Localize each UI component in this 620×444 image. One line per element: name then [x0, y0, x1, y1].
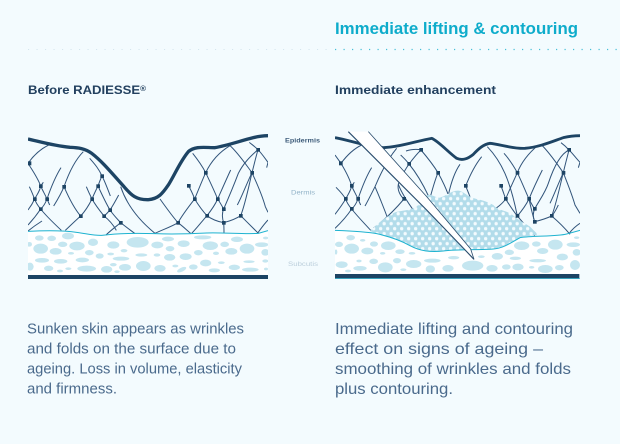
- filler deposit: [370, 191, 538, 251]
- text block: before description: ageing. Loss in volume, elasticity: [27, 362, 243, 378]
- fat cells: [335, 235, 581, 273]
- text block: before description: and folds on the surface due to: [27, 342, 236, 358]
- fibre nodes: [28, 148, 260, 225]
- subcutis white layer: [335, 230, 580, 275]
- text block: after description: [335, 321, 573, 398]
- dermis boundary line: [28, 231, 268, 235]
- text block: after description: smoothing of wrinkles and folds: [335, 361, 571, 378]
- text block: after description: plus contouring.: [335, 381, 453, 398]
- text block: before description: and firmness.: [27, 382, 117, 398]
- needle: [348, 132, 474, 259]
- subcutis white layer: [28, 231, 268, 276]
- text block: before description: Sunken skin appears as wrinkles: [27, 322, 244, 338]
- label: epidermis: Epidermis: [285, 138, 320, 144]
- fat cells: [26, 233, 269, 274]
- dermis boundary line: [335, 230, 580, 251]
- dotted rule: right: [335, 48, 620, 50]
- subheading: before: Before RADIESSE: [28, 85, 126, 97]
- dotted rule: left: [28, 48, 330, 50]
- main heading: Immediate lifting & contouring: [335, 19, 578, 38]
- base bar: [28, 275, 268, 279]
- text block: after description: Immediate lifting and contouring: [335, 321, 573, 338]
- text block: before description: [27, 322, 244, 398]
- label: dermis: Dermis: [291, 190, 316, 196]
- epidermis line: [28, 136, 268, 200]
- subheading: after: Immediate enhancement: [335, 85, 496, 97]
- subheading: before: ®: [140, 85, 147, 93]
- dermis fibre net: [335, 143, 580, 236]
- epidermis line: [335, 136, 580, 159]
- text block: after description: effect on signs of ageing –: [335, 341, 543, 358]
- fibre nodes: [339, 148, 571, 224]
- base bar: [335, 274, 579, 278]
- label: subcutis: Subcutis: [288, 261, 319, 268]
- panel: before skin diagram: [26, 136, 269, 279]
- dermis fibre net: [28, 142, 268, 235]
- panel: after skin diagram: [335, 132, 581, 279]
